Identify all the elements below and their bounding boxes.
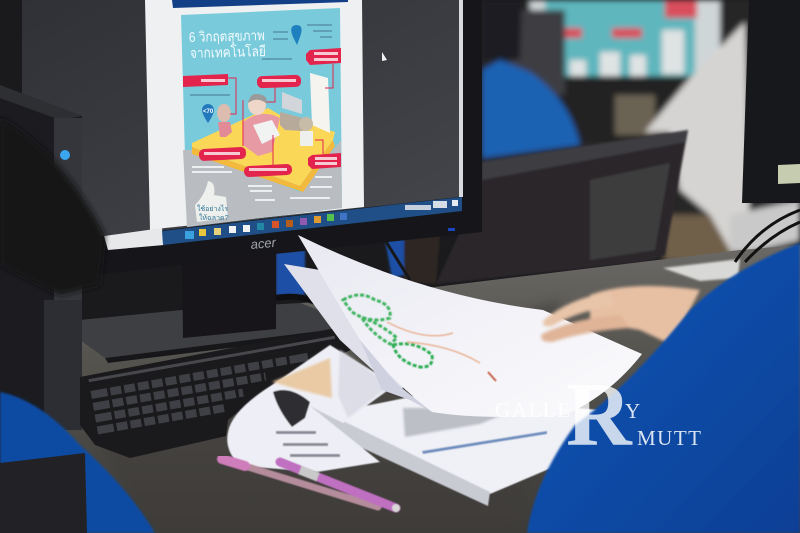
tree drawing (343, 295, 496, 381)
finger: lower (541, 315, 630, 342)
pens (222, 459, 400, 512)
watermark: MUTT (637, 426, 701, 450)
dark object bottom left (0, 453, 87, 533)
watermark: Y (625, 399, 640, 423)
background: classroom behind the monitor (480, 0, 800, 262)
taskbar icons (185, 200, 458, 239)
poster background (181, 8, 342, 227)
television (282, 92, 302, 114)
acer logo: acer (250, 235, 277, 252)
power led (60, 150, 70, 160)
lifted sheet (298, 235, 642, 417)
icon: location pin (291, 25, 302, 45)
mouse cursor (382, 52, 387, 61)
chair back (436, 130, 688, 284)
taskbar (162, 197, 462, 245)
elderly person (243, 94, 280, 156)
icon: age pin with value (202, 104, 214, 123)
finger: upper (543, 292, 615, 326)
red connectors (228, 64, 333, 167)
label captions (201, 52, 338, 171)
screen light edge (459, 0, 463, 197)
book lower pages (343, 395, 600, 494)
pc tower (0, 85, 82, 430)
page image and rule (403, 408, 520, 437)
page shadow (338, 350, 390, 418)
poster title: 6 วิกฤตสุขภาพ (189, 27, 265, 46)
dark page shape (273, 390, 310, 427)
document page (145, 0, 364, 230)
page left strip (104, 228, 164, 250)
lifted sheets with tree drawing (284, 235, 642, 417)
thumbs up with question: ใช้อย่างไร (197, 204, 228, 213)
back sheet (284, 264, 420, 395)
watermark (495, 364, 701, 465)
poster grey footer (183, 140, 342, 227)
girl figure (217, 104, 232, 137)
tan page print (272, 358, 332, 398)
printed list (276, 431, 340, 457)
stand base (80, 303, 360, 358)
icon: age pin with value: <70 (203, 109, 214, 115)
poster title: จากเทคโนโลยี (190, 43, 266, 61)
small poster notes (190, 24, 332, 96)
child figure (299, 117, 313, 146)
blurred foreground object (0, 118, 105, 295)
desk surface (0, 245, 800, 533)
page header band (172, 0, 348, 8)
rolled page (227, 345, 395, 472)
power indicator (448, 228, 455, 231)
blue sleeve foreground (527, 243, 800, 533)
pen: pale pink (222, 459, 378, 507)
monitor stand (182, 250, 276, 338)
main monitor (22, 0, 482, 274)
thumbs up with question: ให้ฉลาด? (199, 213, 229, 222)
screen desktop (22, 0, 459, 236)
keyboard (80, 323, 362, 458)
pen: violet (280, 462, 396, 508)
blue shirt bottom left (0, 392, 155, 533)
palm (590, 286, 700, 345)
footer notes (192, 166, 332, 201)
infographic poster (181, 8, 342, 227)
keys (88, 336, 344, 434)
blue shirt seen under the monitor (276, 235, 440, 295)
poster title (189, 27, 266, 61)
watermark: GALLE (495, 398, 570, 422)
open book (227, 345, 600, 506)
thumbs up with question (195, 181, 229, 222)
yellow floor (192, 108, 335, 186)
right monitor (735, 0, 800, 262)
white door (310, 73, 330, 133)
watermark: R (566, 364, 633, 465)
hand (541, 286, 700, 345)
monitor bezel (22, 0, 482, 274)
red labels (183, 48, 341, 177)
